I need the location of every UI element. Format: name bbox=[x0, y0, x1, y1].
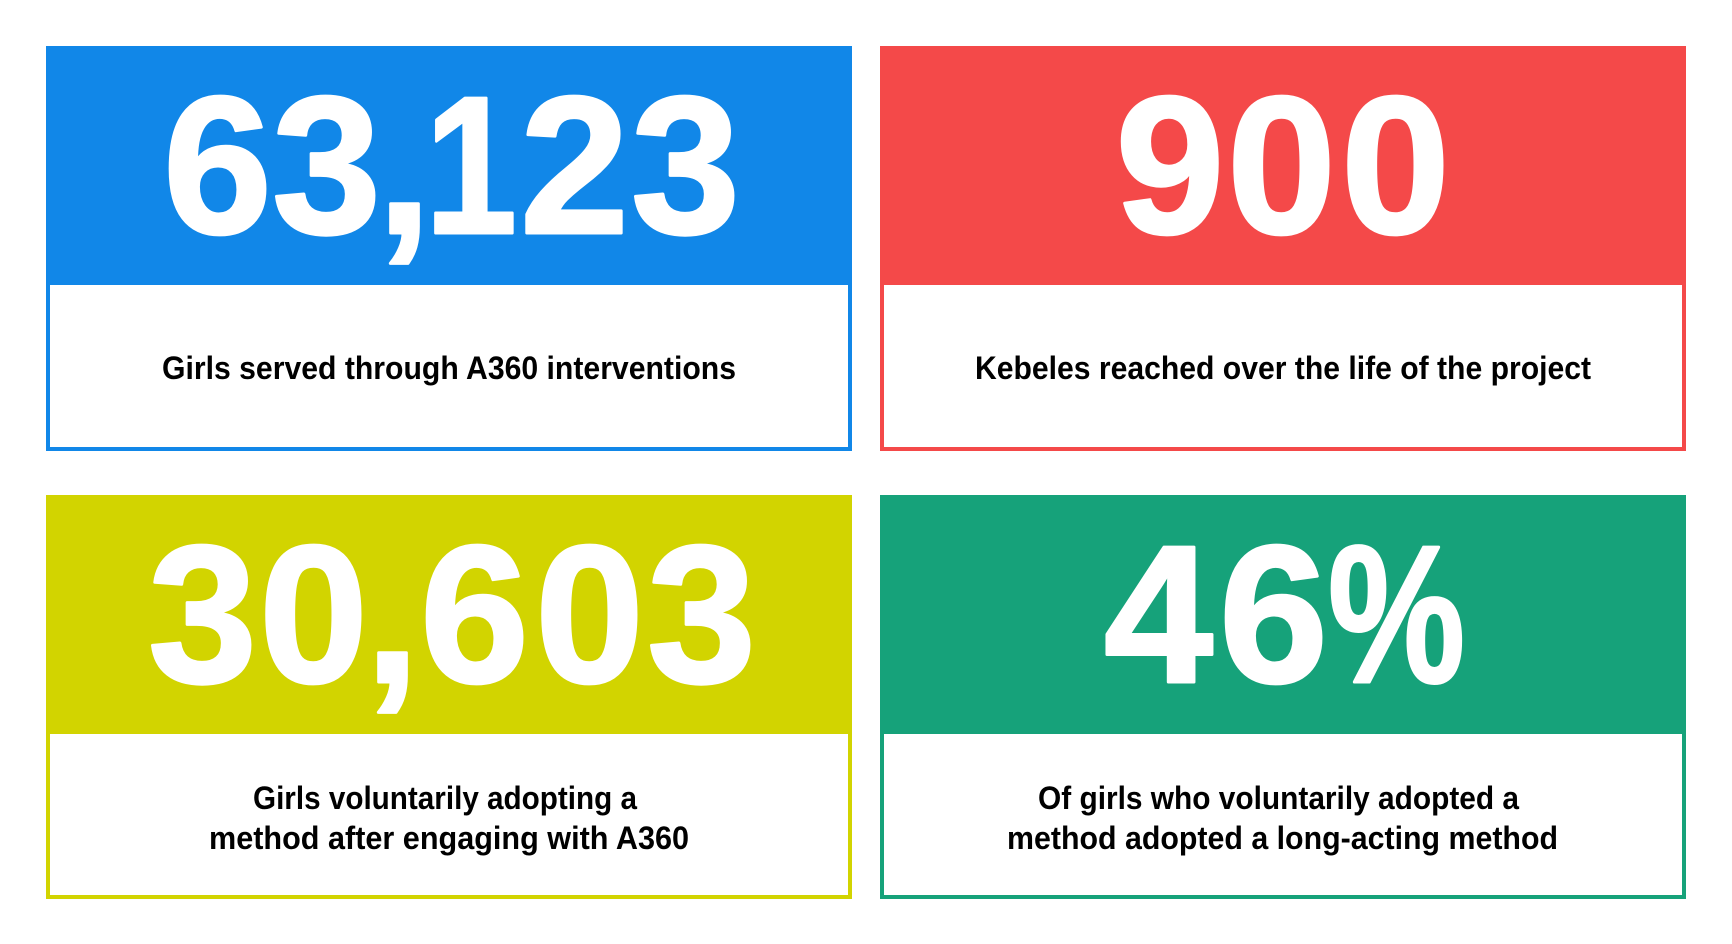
caption: girls adopting: method after engaging with A360 bbox=[209, 820, 689, 856]
header band: kebeles reached bbox=[880, 46, 1686, 285]
header band: girls served bbox=[46, 46, 852, 285]
big number: 63,123: 23 bbox=[520, 56, 740, 275]
big number: 30,603: 30,603 bbox=[148, 505, 756, 724]
big number: 900: 900 bbox=[1116, 56, 1450, 275]
big number: 46%: 46 bbox=[1104, 505, 1328, 724]
panel frame: long-acting share bbox=[882, 497, 1684, 897]
panel: kebeles reached bbox=[880, 46, 1686, 449]
panel: long-acting share bbox=[880, 495, 1686, 897]
caption: long-acting share: method adopted a long-acting method bbox=[1007, 820, 1558, 856]
caption: girls adopting: Girls voluntarily adopting a bbox=[253, 780, 637, 816]
caption: girls served: Girls served through A360 interventions bbox=[162, 350, 736, 386]
caption: long-acting share: Of girls who voluntarily adopted a bbox=[1038, 780, 1519, 816]
panel: girls served bbox=[46, 46, 852, 449]
panel frame: kebeles reached bbox=[882, 48, 1684, 449]
caption: kebeles reached: Kebeles reached over the life of the project bbox=[975, 350, 1591, 386]
panel frame: girls adopting bbox=[48, 497, 850, 897]
big number: 46%: % bbox=[1328, 505, 1465, 724]
big number: 63,123: 1 bbox=[425, 56, 517, 275]
panel: girls adopting bbox=[46, 495, 852, 897]
header band: girls adopting bbox=[46, 495, 852, 734]
big number: 63,123: 63, bbox=[163, 56, 431, 275]
header band: long-acting share bbox=[880, 495, 1686, 734]
panel frame: girls served bbox=[48, 48, 850, 449]
